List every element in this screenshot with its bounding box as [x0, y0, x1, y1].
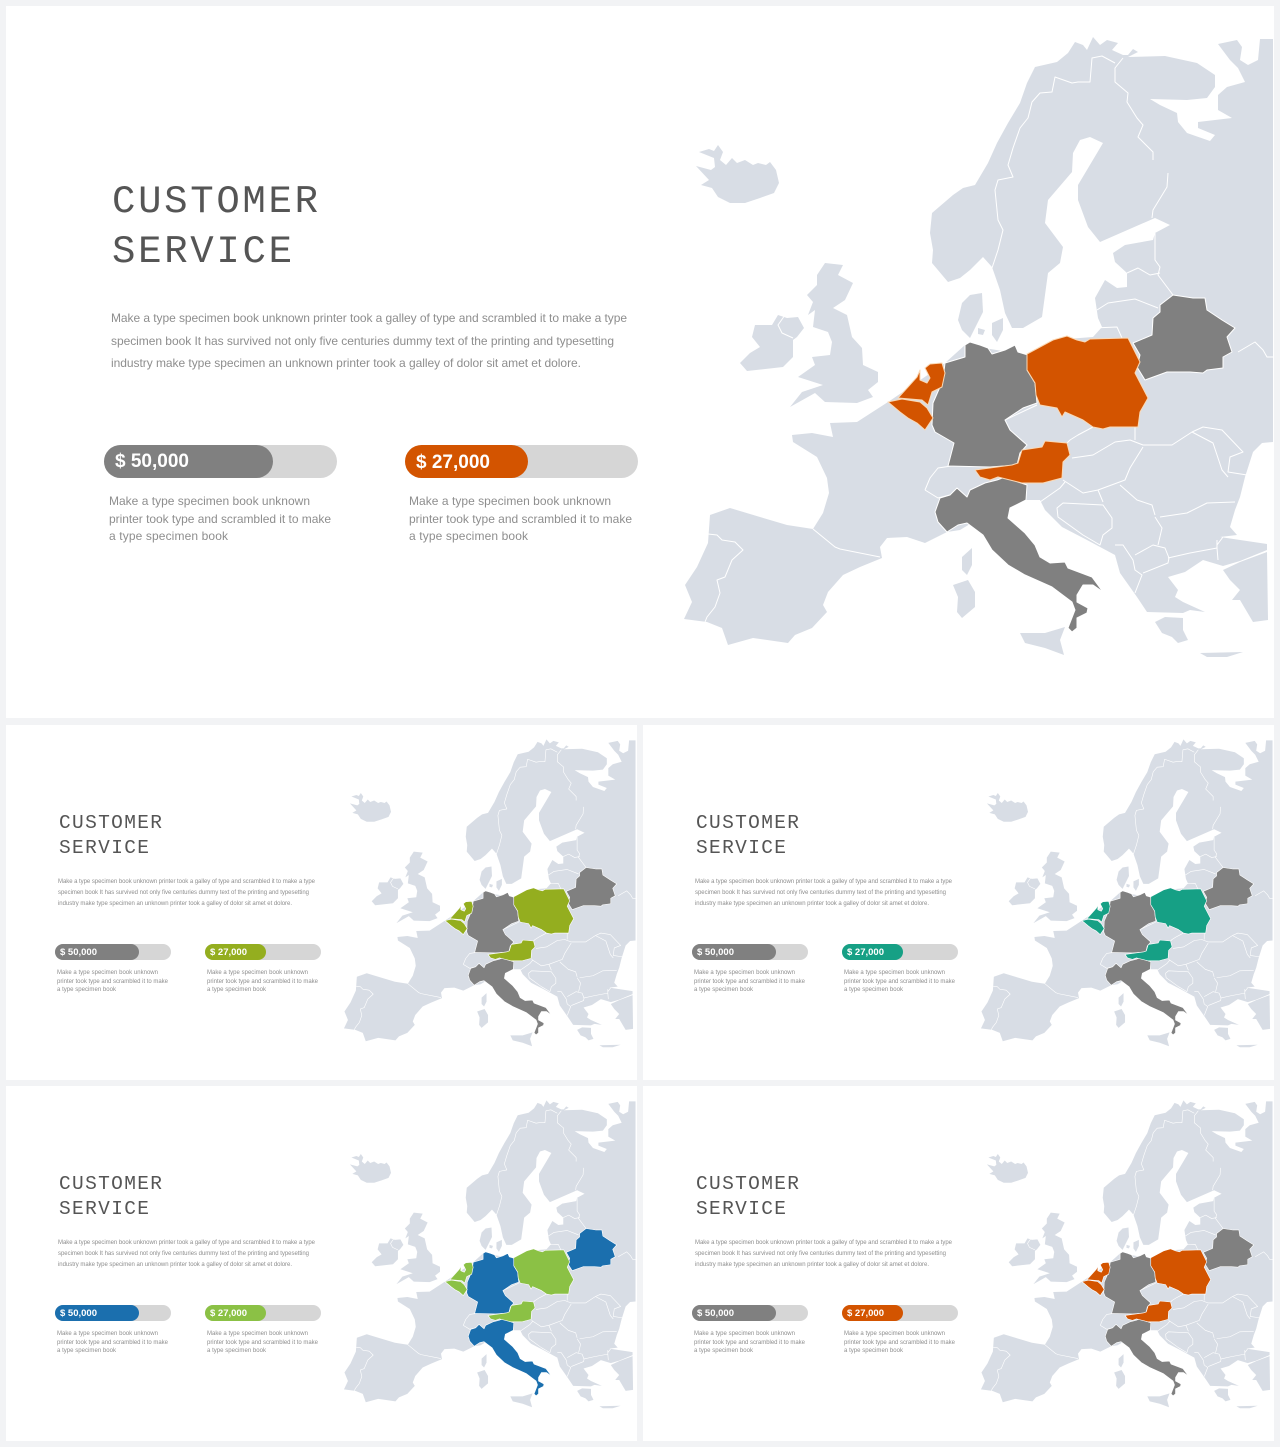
- body text: [695, 1240, 953, 1268]
- caption left: [57, 970, 169, 993]
- caption right: [844, 970, 956, 993]
- caption right: [207, 1331, 319, 1354]
- body text: specimen book It has survived not only five centuries dummy text of the printing and typesetting: [695, 890, 946, 896]
- body text: [695, 879, 953, 907]
- body text: industry make type specimen an unknown printer took a galley of dolor sit amet et dolore.: [58, 1262, 292, 1268]
- title: CUSTOMER: [59, 1173, 162, 1195]
- caption right: [207, 970, 319, 993]
- title: [696, 1173, 799, 1220]
- caption right: Make a type specimen book unknown: [409, 494, 611, 508]
- progress bar: $ 50,000: [692, 944, 808, 960]
- progress bar: $ 50,000: [55, 944, 171, 960]
- progress bar: $ 27,000: [842, 1305, 958, 1321]
- caption left: [694, 970, 806, 993]
- caption right: [409, 494, 632, 543]
- body text: specimen book It has survived not only five centuries dummy text of the printing and typesetting: [111, 334, 614, 348]
- caption right: Make a type specimen book unknown: [207, 1331, 308, 1337]
- caption left: Make a type specimen book unknown: [57, 970, 158, 976]
- title: [59, 812, 162, 859]
- caption left: a type specimen book: [694, 1348, 754, 1354]
- body text: specimen book It has survived not only five centuries dummy text of the printing and typesetting: [58, 1251, 309, 1257]
- panel: green slide: [6, 725, 637, 1080]
- progress bar: $ 27,000: $ 27,000: [210, 947, 247, 958]
- body text: Make a type specimen book unknown printer took a galley of type and scrambled it to make a type: [695, 879, 953, 885]
- caption right: a type specimen book: [409, 529, 529, 543]
- caption left: a type specimen book: [57, 1348, 117, 1354]
- body text: industry make type specimen an unknown printer took a galley of dolor sit amet et dolore.: [111, 356, 581, 370]
- caption right: printer took type and scrambled it to make: [207, 979, 319, 985]
- caption left: printer took type and scrambled it to make: [57, 979, 169, 985]
- progress bar: $ 27,000: $ 27,000: [847, 1308, 884, 1319]
- caption left: printer took type and scrambled it to make: [109, 512, 331, 526]
- title: CUSTOMER: [59, 812, 162, 834]
- progress bar: $ 50,000: $ 50,000: [60, 1308, 97, 1319]
- map of Europe: [684, 37, 1273, 657]
- title: [112, 180, 318, 274]
- progress bar: $ 27,000: $ 27,000: [210, 1308, 247, 1319]
- title: SERVICE: [112, 230, 292, 274]
- caption right: printer took type and scrambled it to make: [844, 1340, 956, 1346]
- progress bar: $ 50,000: $ 50,000: [60, 947, 97, 958]
- progress bar: $ 50,000: [104, 445, 337, 478]
- caption left: Make a type specimen book unknown: [57, 1331, 158, 1337]
- panel: orange slide: [643, 1086, 1274, 1441]
- progress bar: $ 50,000: [692, 1305, 808, 1321]
- caption right: a type specimen book: [207, 987, 267, 993]
- body text: Make a type specimen book unknown printer took a galley of type and scrambled it to make a type: [111, 311, 627, 325]
- caption right: a type specimen book: [844, 1348, 904, 1354]
- panel: main slide: [6, 6, 1274, 718]
- caption left: printer took type and scrambled it to make: [694, 979, 806, 985]
- caption left: printer took type and scrambled it to make: [57, 1340, 169, 1346]
- caption left: Make a type specimen book unknown: [694, 1331, 795, 1337]
- title: [696, 812, 799, 859]
- title: SERVICE: [59, 837, 149, 859]
- progress bar: $ 27,000: [842, 944, 958, 960]
- progress bar: $ 27,000: [205, 944, 321, 960]
- progress bar: $ 50,000: $ 50,000: [115, 451, 189, 472]
- caption right: Make a type specimen book unknown: [844, 970, 945, 976]
- progress bar: $ 27,000: $ 27,000: [847, 947, 884, 958]
- progress bar: $ 50,000: $ 50,000: [697, 1308, 734, 1319]
- progress bar: $ 27,000: [405, 445, 638, 478]
- map of Europe: [981, 739, 1273, 1047]
- caption left: Make a type specimen book unknown: [694, 970, 795, 976]
- body text: specimen book It has survived not only five centuries dummy text of the printing and typesetting: [58, 890, 309, 896]
- caption right: printer took type and scrambled it to make: [207, 1340, 319, 1346]
- title: CUSTOMER: [696, 1173, 799, 1195]
- body text: Make a type specimen book unknown printer took a galley of type and scrambled it to make a type: [695, 1240, 953, 1246]
- panel: blue slide: [6, 1086, 637, 1441]
- map of Europe: [981, 1100, 1273, 1408]
- map of Europe: [344, 739, 636, 1047]
- body text: Make a type specimen book unknown printer took a galley of type and scrambled it to make a type: [58, 879, 316, 885]
- title: CUSTOMER: [696, 812, 799, 834]
- body text: [58, 1240, 316, 1268]
- caption left: printer took type and scrambled it to make: [694, 1340, 806, 1346]
- body text: industry make type specimen an unknown printer took a galley of dolor sit amet et dolore.: [695, 1262, 929, 1268]
- caption left: [694, 1331, 806, 1354]
- body text: [58, 879, 316, 907]
- caption left: [109, 494, 331, 543]
- progress bar: $ 27,000: [205, 1305, 321, 1321]
- body text: Make a type specimen book unknown printer took a galley of type and scrambled it to make a type: [58, 1240, 316, 1246]
- title: [59, 1173, 162, 1220]
- caption left: Make a type specimen book unknown: [109, 494, 310, 508]
- caption left: a type specimen book: [57, 987, 117, 993]
- caption left: [57, 1331, 169, 1354]
- title: CUSTOMER: [112, 180, 318, 224]
- progress bar: $ 27,000: $ 27,000: [416, 452, 490, 473]
- title: SERVICE: [696, 1198, 786, 1220]
- caption right: printer took type and scrambled it to make: [409, 512, 632, 526]
- title: SERVICE: [696, 837, 786, 859]
- body text: industry make type specimen an unknown printer took a galley of dolor sit amet et dolore.: [695, 901, 929, 907]
- panel: teal slide: [643, 725, 1274, 1080]
- caption right: Make a type specimen book unknown: [207, 970, 308, 976]
- progress bar: $ 50,000: $ 50,000: [697, 947, 734, 958]
- caption left: a type specimen book: [694, 987, 754, 993]
- progress bar: $ 50,000: [55, 1305, 171, 1321]
- caption left: a type specimen book: [109, 529, 229, 543]
- title: SERVICE: [59, 1198, 149, 1220]
- body text: specimen book It has survived not only five centuries dummy text of the printing and typesetting: [695, 1251, 946, 1257]
- body text: industry make type specimen an unknown printer took a galley of dolor sit amet et dolore.: [58, 901, 292, 907]
- caption right: printer took type and scrambled it to make: [844, 979, 956, 985]
- caption right: a type specimen book: [207, 1348, 267, 1354]
- map of Europe: [344, 1100, 636, 1408]
- caption right: a type specimen book: [844, 987, 904, 993]
- caption right: Make a type specimen book unknown: [844, 1331, 945, 1337]
- body text: [111, 311, 627, 370]
- caption right: [844, 1331, 956, 1354]
